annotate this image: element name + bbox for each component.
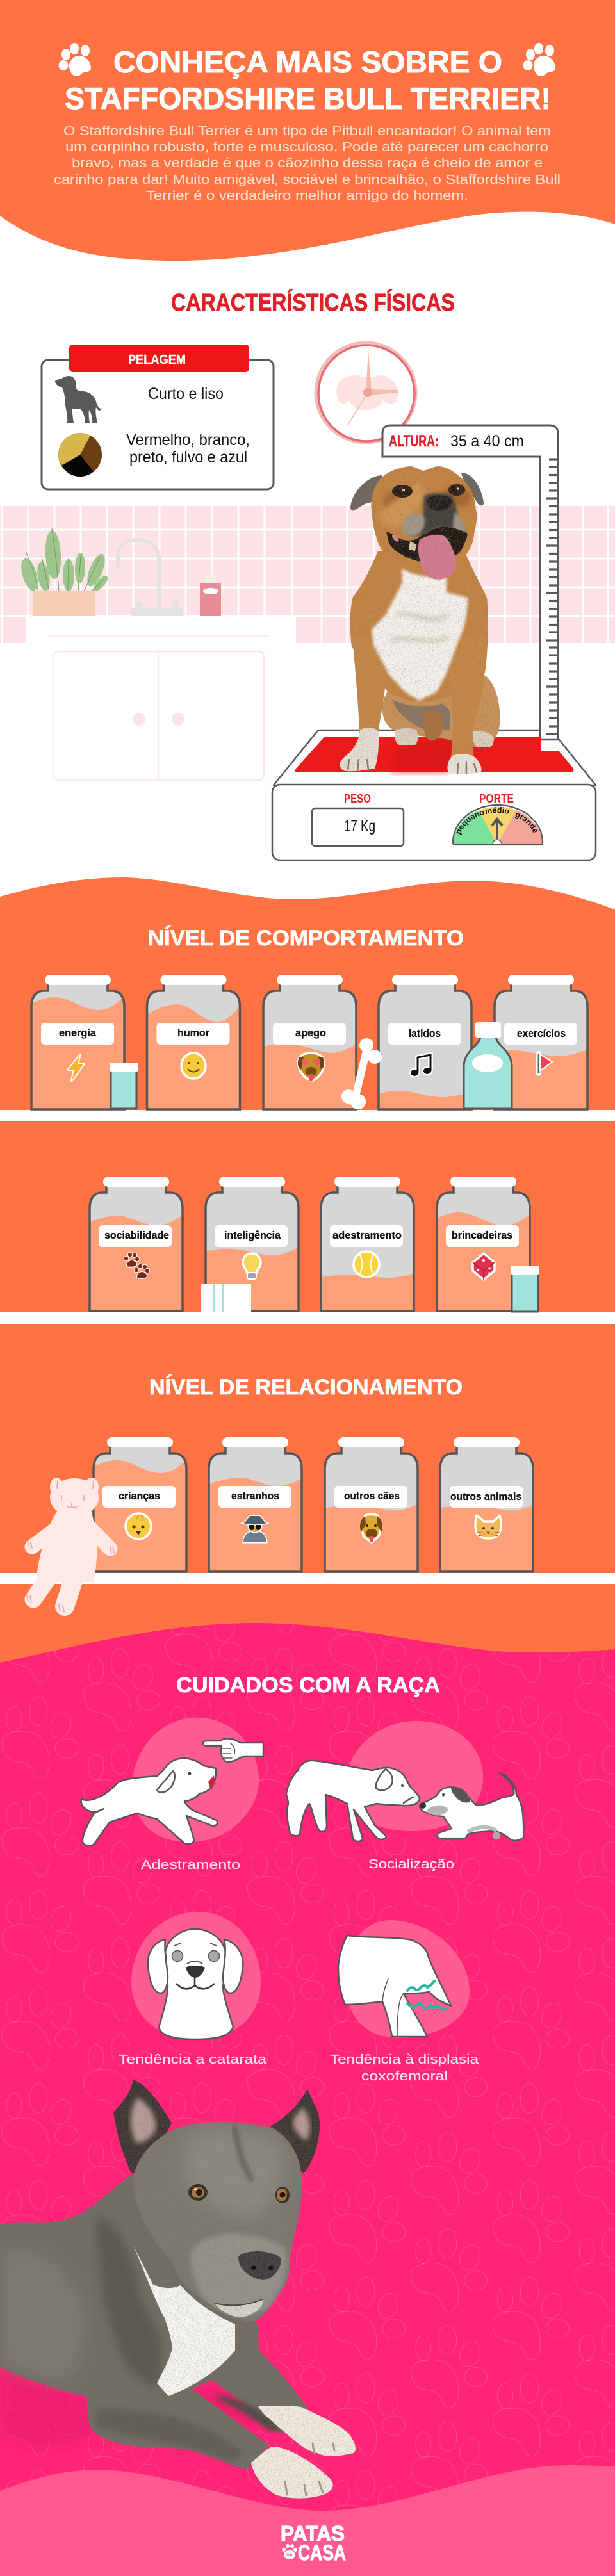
illustration: running puppy [81,1758,217,1846]
mouth [386,527,468,562]
pelagem header: PELAGEM [128,353,186,367]
torso [350,551,488,702]
intro text: carinho para dar! Muito amigável, sociável e brincalhão, o Staffordshire Bull [54,172,561,187]
care label: displasia [330,2053,479,2083]
jar: crianças [94,1437,186,1572]
ruler ticks [546,459,558,734]
coat color text: preto, fulvo e azul [129,448,247,466]
weight readout: 17 Kg [344,817,375,835]
size gauge [452,792,543,845]
icon: potted plant [18,528,110,617]
icon: lightning [69,1055,84,1080]
logo [281,2522,346,2565]
shelf 2 [0,1312,615,1324]
icon: title paw right [523,43,555,76]
icon: light bulb [243,1253,261,1279]
intro text: um corpinho robusto, forte e musculoso. Pode até parecer um cachorro [65,140,548,154]
icon: tennis ball [354,1251,379,1277]
jar: latidos [379,975,472,1109]
right ear [270,2089,320,2174]
logo paw: DA [286,2554,293,2557]
size gauge: grande [515,813,537,833]
title: STAFFORDSHIRE BULL TERRIER! [65,81,551,115]
left front leg [352,631,388,733]
altura value: 35 a 40 cm [450,432,524,450]
jar: brincadeiras: brincadeiras [452,1229,512,1241]
coat color text: Vermelho, branco, [126,431,250,449]
icon: bone [341,1038,382,1109]
size gauge: PORTE [479,792,514,805]
jar: exercícios [495,975,587,1109]
logo: CASA [298,2541,346,2565]
jar: outros cães: outros cães [344,1490,400,1502]
intro text: Terrier é o verdadeiro melhor amigo do homem. [146,188,468,203]
icon: dice [473,1253,495,1280]
illustration: dog head cataract [148,1929,243,2039]
care label: catarata: Tendência a catarata [119,2053,267,2067]
white chest [372,569,468,701]
mouth [215,2299,263,2317]
height ruler [382,425,558,751]
left ear [350,475,382,511]
jar: brincadeiras [437,1177,530,1311]
nose [238,2251,281,2280]
white box with teal stripes [201,1284,251,1312]
shelf 3 [0,1573,615,1584]
care label: displasia: Tendência à displasia [330,2053,479,2067]
photo: gray dog [0,2080,356,2499]
intro text: bravo, mas a verdade é que o cãozinho dessa raça é cheio de amor e [72,156,543,170]
coat length text: Curto e liso [148,385,224,403]
jar: humor: humor [177,1027,209,1039]
weight readout [312,792,404,846]
teal bottle [464,1022,512,1109]
illustration: big dog [286,1761,420,1841]
icon: smiley [181,1053,206,1079]
jar: inteligência: inteligência [224,1229,281,1241]
left ear [113,2080,172,2173]
size gauge: pequeno [456,811,484,835]
icon: faucet [118,540,183,617]
shelf 1 [0,1110,615,1121]
icon: dog face [360,1514,382,1542]
icon: dog with heart eyes [298,1053,324,1081]
jar: inteligência [206,1177,299,1311]
jar: outros animais: outros animais [450,1490,521,1503]
icon: cat face [475,1515,501,1538]
jar: apego [263,975,356,1109]
right front paw [447,754,482,774]
eyes [392,485,413,498]
title: CONHEÇA MAIS SOBRE O [113,45,502,79]
head [371,466,477,576]
icon: soap bottle [200,568,221,617]
left front paw [340,728,379,771]
haunches [382,666,500,747]
care label: displasia: coxofemoral [361,2069,448,2083]
scale platform [272,730,596,860]
jar: energia [31,975,124,1109]
color pie [58,433,102,477]
orange behaviour background [0,877,615,1665]
icon: baby [126,1513,151,1539]
icon: music notes [409,1055,432,1077]
muzzle [406,493,466,536]
pelagem header [69,345,249,372]
panel: pelagem [42,345,274,489]
teal cylinder [110,1063,138,1109]
jar: energia: energia [59,1027,97,1039]
floor shadow [0,2370,253,2447]
photo: tan dog [340,466,500,774]
teal cylinder 2 [511,1266,539,1312]
icon: dog silhouette [55,376,102,423]
front paw lower [251,2447,333,2499]
jar: adestramento [321,1177,414,1311]
weight readout: PESO [344,792,371,805]
body [0,2174,308,2470]
jar: humor [147,975,240,1109]
jar: estranhos: estranhos [231,1490,279,1502]
heading: nível de relacionamento: NÍVEL DE RELACIONAMENTO [149,1375,463,1399]
jar: latidos: latidos [409,1027,441,1039]
icon: paws [124,1253,149,1278]
jar: sociabilidade: sociabilidade [104,1229,169,1241]
jar: exercícios: exercícios [517,1027,566,1039]
heading: nível de comportamento: NÍVEL DE COMPORTAMENTO [148,926,464,950]
jar: sociabilidade [90,1177,183,1311]
muzzle [191,2234,287,2315]
icon: title paw left [59,43,91,76]
illustration: dog hip [338,1936,451,2037]
right ear [461,473,484,505]
jar: apego: apego [295,1027,326,1039]
care label: socialização: Socialização [368,1857,454,1871]
jar: estranhos [209,1437,302,1572]
title [65,45,551,115]
icon: wall clock [316,343,416,443]
blobs behind care illustrations [131,1718,483,2039]
coat color text [126,431,250,466]
white chest [133,2246,235,2396]
eyes [188,2184,208,2201]
pink care background [0,1623,615,2576]
jar: crianças: crianças [119,1490,160,1502]
size gauge: médio [486,807,509,814]
front paw upper [258,2406,356,2456]
head [133,2123,302,2322]
bathroom tile wall [0,506,615,643]
jar: adestramento: adestramento [332,1229,402,1241]
care label: adestramento: Adestramento [141,1858,240,1872]
back paws [395,728,418,745]
sink counter and cabinet [26,616,296,780]
footer wave [0,2465,615,2576]
intro text [54,124,561,203]
jar: outros cães [325,1437,418,1572]
jar: outros animais [440,1437,533,1572]
altura label: ALTURA: [389,432,439,450]
icon: flag [539,1054,552,1073]
tail [424,711,443,740]
illustration: pointing hand [203,1738,263,1762]
tongue [418,535,456,580]
intro text: O Staffordshire Bull Terrier é um tipo de Pitbull encantador! O animal tem [63,124,551,138]
nose [427,495,452,511]
right front leg [448,634,486,759]
icon: spy [243,1516,266,1542]
header background [0,0,615,261]
illustration: small dog [420,1773,523,1841]
heading: cuidados com a raça: CUIDADOS COM A RAÇA [176,1673,440,1697]
teddy bear [27,1478,114,1612]
heading: características físicas: CARACTERÍSTICAS FÍSICAS [171,288,455,316]
logo: PATAS [281,2522,345,2545]
